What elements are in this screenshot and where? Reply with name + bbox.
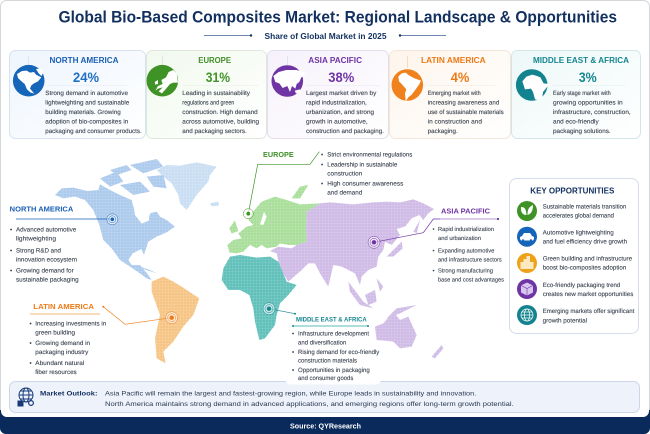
icon: car xyxy=(517,227,537,247)
description xyxy=(45,90,142,135)
heading: NORTH AMERICA xyxy=(10,204,74,213)
share: 3% xyxy=(579,70,597,85)
opportunity text 5: Emerging markets offer significant xyxy=(543,308,635,315)
callout: Europe xyxy=(243,150,412,219)
footer band xyxy=(0,400,650,434)
opportunity text 1: accelerates global demand xyxy=(543,213,615,220)
description: Strong demand in automotive xyxy=(45,90,129,97)
bullets: and demand xyxy=(327,189,363,196)
bullets: • xyxy=(432,268,435,274)
bullets: Strong R&D and xyxy=(16,248,62,254)
bullets: construction xyxy=(327,171,363,178)
icon: globe xyxy=(517,305,537,325)
bullets: • xyxy=(30,340,32,347)
opportunity text 4: creates new market opportunities xyxy=(543,291,633,298)
opportunity text 3 xyxy=(543,256,633,272)
opportunity text 4: Eco-friendly packaging trend xyxy=(543,282,621,289)
description xyxy=(428,90,504,135)
opportunity text 3: Green building and infrastructure xyxy=(543,256,633,263)
opportunity text 1 xyxy=(543,204,627,220)
bullets: Rapid industrialization xyxy=(438,226,494,233)
description: Early stage market with xyxy=(553,90,611,97)
heading: NORTH AMERICA xyxy=(50,56,119,65)
marker xyxy=(166,312,178,324)
heading: MIDDLE EAST & AFRICA xyxy=(296,317,367,324)
source: Source: QYResearch xyxy=(290,424,361,430)
panel: Latin America card xyxy=(390,50,510,138)
heading: EUROPE xyxy=(263,150,294,159)
bullets: and diversification xyxy=(298,339,347,346)
description: in construction and xyxy=(428,118,483,126)
description: lightweighting and sustainable xyxy=(45,100,130,106)
outlook text xyxy=(105,390,514,408)
opportunity text 5: growth potential xyxy=(543,317,587,324)
bullets: Opportunities in packaging xyxy=(298,367,370,374)
bullets: Rising demand for eco-friendly xyxy=(298,349,380,356)
description: growing opportunities in xyxy=(553,100,623,106)
bullets xyxy=(30,320,107,376)
icon: Europe globe xyxy=(146,65,178,96)
bullets: • xyxy=(10,248,12,254)
icon: buildings xyxy=(517,253,537,273)
callout: Asia Pacific xyxy=(368,206,504,283)
outlook text: Asia Pacific will remain the largest and fastest-growing region, while Europe leads in sustainability and innovation. xyxy=(105,390,476,397)
bullets: Strict environmental regulations xyxy=(327,152,412,159)
description: and eco-friendly xyxy=(553,118,600,126)
market outlook panel xyxy=(10,382,640,412)
bullets: base and cost advantages xyxy=(438,276,504,283)
description: Largest market driven by xyxy=(306,90,377,97)
heading: ASIA PACIFIC xyxy=(308,56,362,65)
opportunity text 2: and fuel efficiency drive growth xyxy=(543,238,628,245)
share: 4% xyxy=(451,70,469,85)
share: 31% xyxy=(206,70,230,85)
panel: North America card xyxy=(10,50,146,138)
bullets: and consumer goods xyxy=(298,375,353,382)
description: Leading in sustainability xyxy=(182,90,251,97)
bullets: and infrastructure sectors xyxy=(438,256,502,263)
bullets: High consumer awareness xyxy=(327,180,403,187)
description: building materials. Growing xyxy=(45,109,121,116)
opportunity text 5 xyxy=(543,308,635,324)
description: construction. High demand xyxy=(182,109,258,116)
bullets: Leadership in sustainable xyxy=(327,162,398,169)
description: across automotive, building xyxy=(182,118,260,126)
icon: package xyxy=(517,279,537,299)
description xyxy=(182,90,260,135)
opportunity text 4 xyxy=(543,282,633,298)
marker xyxy=(263,303,275,315)
description: regulations and green xyxy=(182,100,235,106)
panel: key opportunities xyxy=(510,178,638,334)
panel: Asia Pacific card xyxy=(268,50,388,138)
bullets: Abundant natural xyxy=(35,360,84,367)
bullets: • xyxy=(30,360,32,367)
callout: North America xyxy=(10,204,118,284)
panel: Europe card xyxy=(146,50,266,138)
icon: leaf xyxy=(517,201,537,221)
bullets: sustainable packaging xyxy=(16,276,79,284)
bullets: Infrastructure development xyxy=(298,331,369,338)
bullets: • xyxy=(10,226,12,233)
bullets: • xyxy=(432,227,435,233)
heading: EUROPE xyxy=(198,56,231,65)
bullets: Advanced automotive xyxy=(16,226,77,233)
bullets: • xyxy=(321,152,323,159)
outlook label: Market Outlook: xyxy=(40,390,98,397)
description: Emerging market with xyxy=(428,90,481,97)
bullets: • xyxy=(321,162,323,169)
bullets: Increasing investments in xyxy=(35,320,107,327)
bullets: innovation ecosystem xyxy=(16,256,77,264)
opportunity text 3: boost bio-composites adoption xyxy=(543,265,627,272)
bullets: lightweighting xyxy=(16,236,57,242)
heading: LATIN AMERICA xyxy=(33,302,95,311)
description: urbanization, and strong xyxy=(306,109,375,116)
bullets xyxy=(292,331,380,382)
outlook text: North America maintains strong demand in advanced applications, and emerging regions offer long-term growth potential. xyxy=(105,401,514,408)
icon: globe and magnifier xyxy=(18,388,33,406)
map: Eurasia, Africa, Oceania xyxy=(222,185,443,358)
marker xyxy=(243,209,253,219)
description: infrastructure, construction, xyxy=(553,109,631,116)
bullets: Expanding automotive xyxy=(438,247,495,254)
bullets: • xyxy=(30,320,32,327)
world map xyxy=(55,159,443,363)
bullets: • xyxy=(321,180,323,187)
opportunity text 1: Sustainable materials transition xyxy=(543,204,627,211)
share: 38% xyxy=(328,70,354,85)
icon: North America globe xyxy=(13,65,44,96)
callout: Latin America xyxy=(30,302,178,376)
bullets: • xyxy=(292,349,294,356)
description: and packaging sectors. xyxy=(182,128,247,135)
description xyxy=(306,90,384,135)
panel: Middle East & Africa card xyxy=(512,50,640,138)
subtitle: Share of Global Market in 2025 xyxy=(264,32,387,41)
bullets xyxy=(321,152,412,196)
description: packaging and consumer products. xyxy=(45,128,142,135)
description: packaging solutions. xyxy=(553,128,611,135)
marker xyxy=(368,236,380,248)
bullets: Growing demand for xyxy=(16,268,74,274)
bullets: construction materials xyxy=(298,357,357,364)
opportunity text 2 xyxy=(543,229,628,245)
heading: LATIN AMERICA xyxy=(421,56,486,65)
bullets: fiber resources xyxy=(35,369,77,376)
bullets: packaging industry xyxy=(35,349,89,356)
opportunity text 2: Automotive lightweighting xyxy=(543,229,614,236)
heading: KEY OPPORTUNITIES xyxy=(530,186,615,195)
heading: ASIA PACIFIC xyxy=(441,206,491,215)
bullets: • xyxy=(292,367,294,374)
description: packaging. xyxy=(428,128,458,135)
description: adoption of bio-composites in xyxy=(45,118,129,126)
bullets: • xyxy=(432,248,435,254)
heading: MIDDLE EAST & AFRICA xyxy=(533,56,629,65)
icon: Latin America globe xyxy=(392,69,423,101)
icon: Africa globe xyxy=(516,69,549,101)
bullets xyxy=(432,226,504,283)
description: construction and packaging. xyxy=(306,128,384,135)
bullets: Growing demand in xyxy=(35,340,91,347)
bullets: • xyxy=(10,268,12,274)
bullets: green building xyxy=(35,330,76,336)
map: Americas xyxy=(55,159,219,363)
marker xyxy=(107,214,118,225)
description: growth in automotive, xyxy=(306,118,368,126)
share: 24% xyxy=(73,70,99,85)
icon: Asia globe xyxy=(272,65,305,97)
bullets xyxy=(10,226,79,284)
bullets: • xyxy=(292,331,294,338)
bullets: Strong manufacturing xyxy=(438,267,493,274)
bullets: and urbanization xyxy=(438,235,481,242)
description: use of sustainable materials xyxy=(428,109,504,116)
description xyxy=(553,90,631,135)
callout: Middle East & Africa xyxy=(263,303,380,384)
description: increasing awareness and xyxy=(428,100,500,106)
description: rapid industrialization, xyxy=(306,100,367,106)
